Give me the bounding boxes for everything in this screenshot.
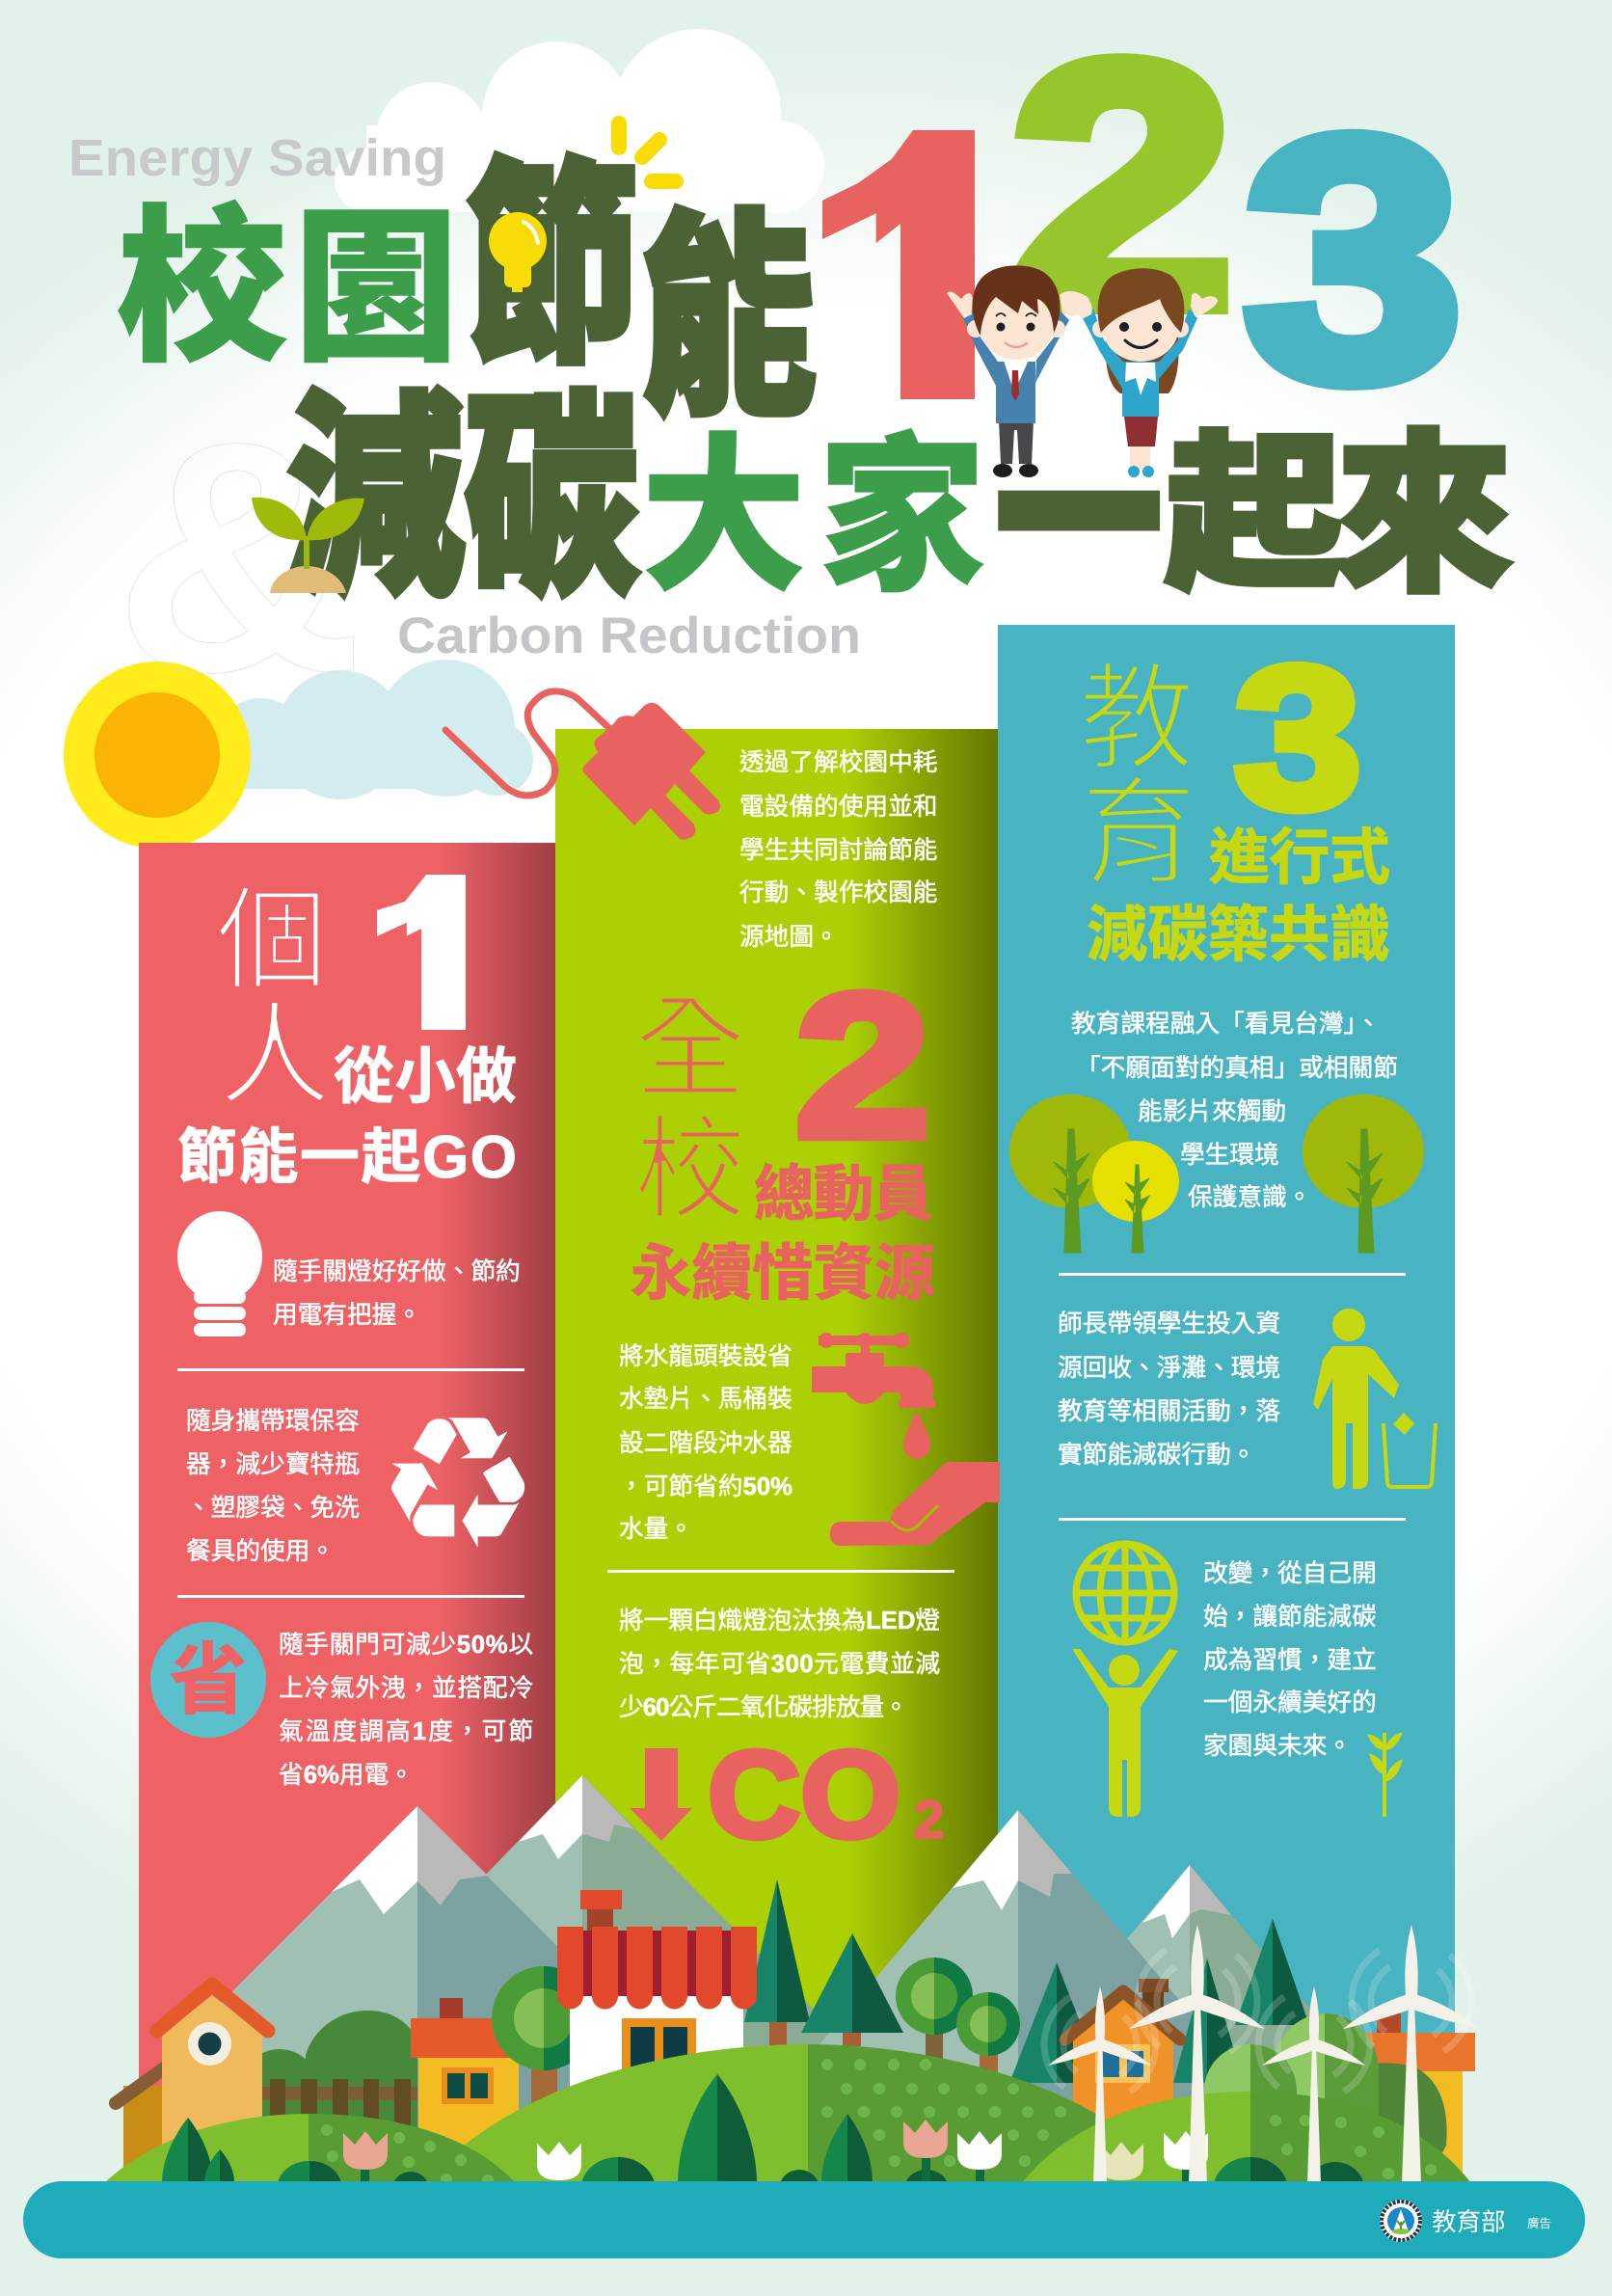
title line one [117,147,817,442]
character: girl [1068,268,1218,477]
text: documentaries: 保護意識。 [1188,1183,1311,1211]
text: teachers lead: 教育等相關活動，落 [1058,1397,1280,1425]
text: close doors: 上冷氣外洩，並搭配冷 [279,1674,533,1702]
text: water saving: ，可節省約50% [619,1472,793,1500]
text: change starts with yourself: 成為習慣，建立 [1203,1646,1377,1674]
text: reusable containers [186,1407,360,1565]
text: change starts with yourself: 始，讓節能減碳 [1203,1603,1377,1631]
text: energy map: 透過了解校園中耗 [739,748,937,776]
panel: whole school (green) [555,729,998,2098]
english caption: Energy Saving: Energy Saving [68,129,446,187]
power cable [445,691,612,796]
text: energy map: 行動、製作校園能 [739,878,937,906]
sun [64,662,251,849]
title line two: 家 [819,422,985,611]
character: boy [947,265,1088,477]
text: close doors [279,1631,533,1789]
text: teachers lead: 師長帶領學生投入資 [1058,1310,1280,1337]
title line one: 園 [294,198,459,382]
text: reusable containers: 餐具的使用。 [186,1537,335,1565]
illustration: right foreground hill [1022,2092,1471,2183]
text: switch off lights [273,1257,521,1329]
illustration: wind rings [1021,1917,1495,2123]
panel heading: education: 3 [1234,626,1361,851]
text: close doors: 省6%用電。 [279,1761,414,1789]
illustration: left house with bushes and fence [116,1985,417,2182]
text: water saving: 水量。 [619,1515,693,1543]
text: water saving [619,1342,793,1543]
text: teachers lead: 實節能減碳行動。 [1058,1441,1255,1469]
text: close doors: 隨手關門可減少50%以 [279,1631,533,1659]
illustration: leaf trees and shrubs [162,2074,1364,2216]
illustration: orange house [1065,1979,1180,2121]
text: advertisement label: 廣告 [1527,2217,1551,2230]
panel heading: education: 進行式 [1209,824,1390,892]
panel heading: whole school: 總動員 [754,1161,933,1229]
text: teachers lead: 源回收、淨灘、環境 [1058,1354,1280,1382]
big number 3: 3 [1244,68,1463,451]
text: energy map: 學生共同討論節能 [739,836,937,864]
text: documentaries: 「不願面對的真相」或相關節 [1076,1054,1398,1082]
illustration: yellow house [411,1998,519,2145]
icon: down arrow with CO2: 2 [914,1789,944,1850]
icon: plug [582,703,720,840]
icon: recycling symbol: ♻ [376,1377,540,1590]
ampersand outline: & [114,374,364,741]
icon: save badge [150,1622,266,1738]
illustration: round tree beside white house [492,1966,596,2104]
text: reusable containers: 隨身攜帶環保容 [186,1407,360,1435]
panel heading: whole school [631,953,935,1308]
text: documentaries: 能影片來觸動 [1138,1097,1286,1125]
title line one: 節 [466,147,639,391]
text: teachers lead [1058,1310,1280,1469]
panel heading: education [1079,626,1390,969]
title line two: 來 [1334,419,1514,612]
title line one: 校 [117,195,287,383]
icon: down arrow with CO2: CO [708,1726,900,1864]
text: switch off lights: 用電有把握。 [273,1301,421,1329]
panel heading: whole school: 永續惜資源 [631,1240,935,1308]
icon: down arrow with CO2 [630,1726,944,1864]
text: water saving: 水墊片、馬桶裝 [619,1385,793,1413]
panel: individual (red) [139,843,555,2096]
title line two: 減 [286,377,465,624]
panel heading: whole school: 校 [634,1107,746,1232]
title line two: 碳 [464,377,640,622]
text: LED bulbs: 少60公斤二氧化碳排放量。 [619,1693,908,1721]
text: documentaries: 教育課程融入「看見台灣」、 [1071,1010,1381,1038]
text: close doors: 氣溫度調高1度，可節 [279,1717,533,1745]
big number 2: 2 [1009,0,1234,380]
text: documentaries: 學生環境 [1180,1141,1279,1169]
text: change starts with yourself: 一個永續美好的 [1203,1688,1377,1716]
illustration: far right house and bushes [1204,2013,1475,2181]
text: energy map: 源地圖。 [739,923,839,951]
icon: white bulb [177,1211,262,1337]
icon: small plant [1367,1732,1403,1817]
text: reusable containers: 器，減少寶特瓶 [186,1450,360,1478]
text: LED bulbs: 泡，每年可省300元電費並減 [619,1650,940,1678]
title line two [286,377,1514,663]
icon: person holding globe [1072,1543,1178,1817]
footer band [23,2181,1585,2258]
pale blue cloud [216,660,533,799]
text: LED bulbs [619,1607,940,1721]
icon: save badge: 省 [170,1637,247,1723]
panel: education (blue) [998,625,1455,2110]
icon: sprout [252,498,364,593]
icon: trees [1009,1094,1424,1253]
panel heading: individual: 從小做 [334,1043,517,1111]
panel heading: whole school: 2 [795,953,930,1180]
illustration: round trees right of centre [896,1958,1020,2076]
icon: faucet and hand [812,1333,1000,1546]
logo: ministry of education seal [1380,2200,1422,2242]
illustration: left foreground hill [104,2114,516,2186]
panel heading: whole school: 全 [634,986,746,1112]
text: water saving: 將水龍頭裝設省 [619,1342,793,1370]
illustration: tulips [343,2120,1208,2183]
text: documentaries [1071,1010,1398,1211]
panel heading: individual: 個 [216,878,328,1003]
illustration: big central hill [424,2044,1191,2183]
big number 1: 1 [783,56,1058,479]
panel heading: individual [178,875,516,1184]
illustration: pine trees [744,1879,1309,2083]
panel heading: individual: 人 [219,993,331,1119]
illustration: mountains [162,1775,1340,2218]
text: change starts with yourself [1203,1559,1377,1760]
text: change starts with yourself: 改變，從自己開 [1203,1559,1377,1587]
white cloud at the top [335,29,824,213]
title line two: 大 [641,422,806,611]
panel heading: education: 育 [1081,770,1196,899]
text: LED bulbs: 將一顆白熾燈泡汰換為LED燈 [619,1607,940,1634]
title line one: 能 [641,195,817,442]
text: energy map: 電設備的使用並和 [739,793,937,821]
icon: light bulb on title [489,123,676,292]
title line two: 起 [1165,420,1344,609]
text: ministry of education: 教育部 [1432,2209,1506,2236]
panel heading: education: 教 [1079,655,1195,784]
panel heading: education: 減碳築共識 [1087,902,1390,969]
illustration: wind turbines [1048,1925,1479,2183]
title line two: 一 [992,380,1166,663]
icon: person recycling [1313,1309,1436,1489]
english caption: Carbon Reduction: Carbon Reduction [397,608,861,664]
illustration: red-roofed white house [557,1890,757,2102]
text: energy map [739,748,937,951]
text: reusable containers: 、塑膠袋、免洗 [186,1494,360,1522]
panel heading: individual: 1 [351,833,516,1077]
text: change starts with yourself: 家園與未來。 [1203,1732,1352,1760]
panel heading: individual: 節能一起GO [177,1124,517,1191]
text: switch off lights: 隨手關燈好好做、節約 [273,1257,521,1285]
text: water saving: 設二階段沖水器 [619,1429,793,1457]
